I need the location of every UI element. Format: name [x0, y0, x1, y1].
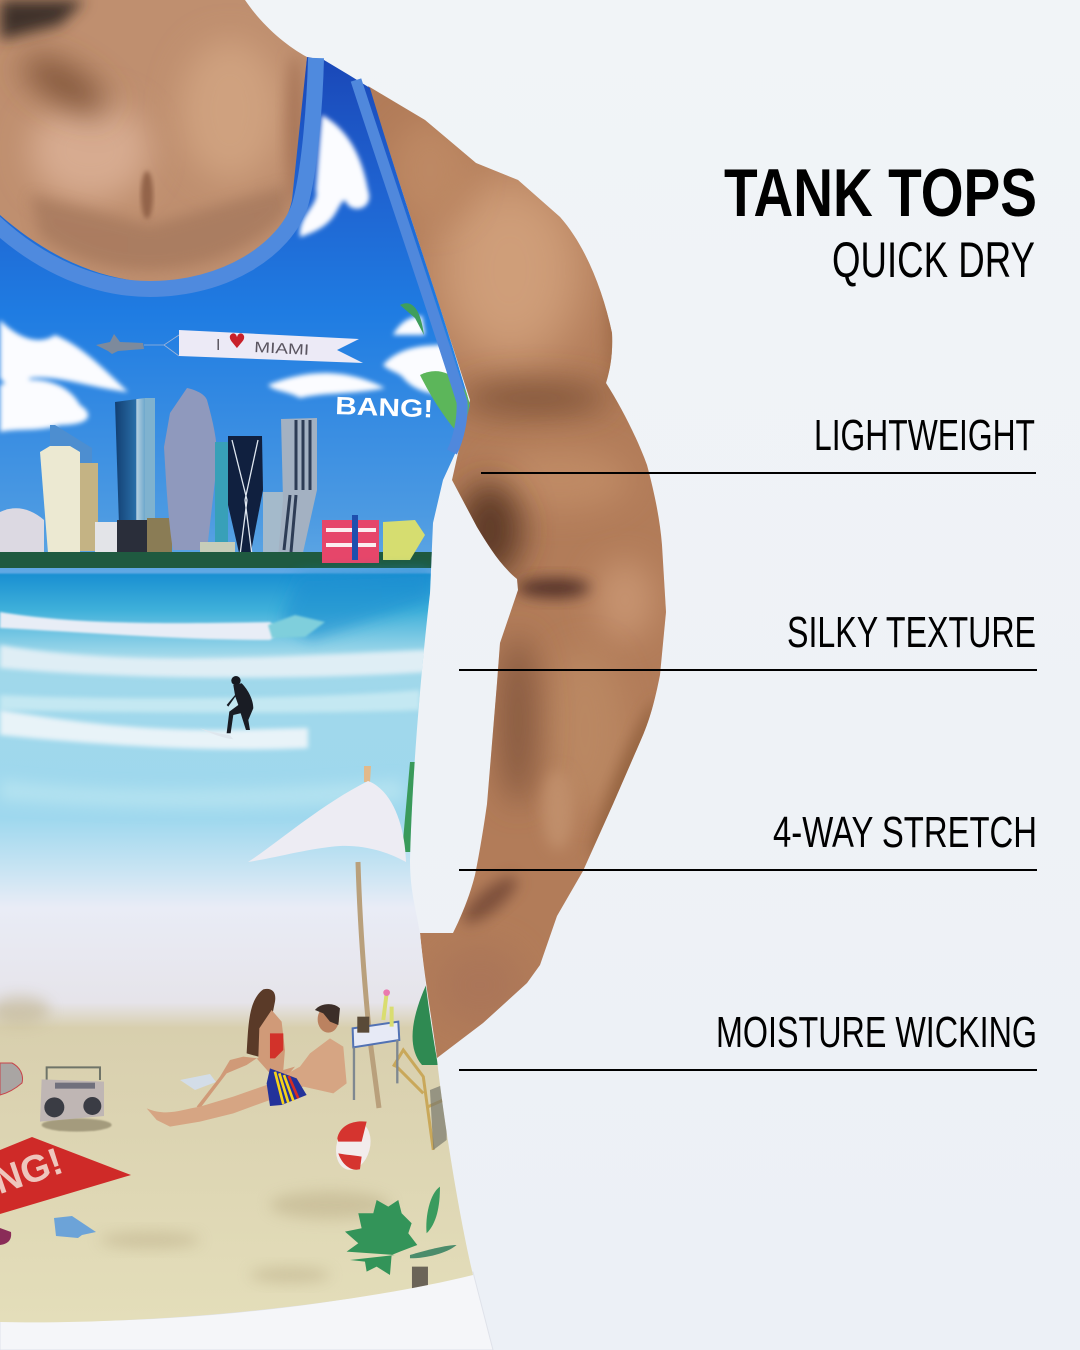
model chest and neck [0, 0, 307, 281]
tank top [0, 57, 473, 1322]
red towel [0, 1137, 131, 1214]
arm binding [356, 80, 462, 452]
sand shadows [0, 996, 390, 1283]
side table with drinks [353, 989, 399, 1100]
model arm and shoulder [360, 80, 680, 1070]
beach ball [331, 1118, 376, 1174]
white shorts [0, 1272, 493, 1350]
beach couple [147, 989, 347, 1127]
purple object [0, 1228, 11, 1245]
bottom palm [345, 1187, 457, 1297]
plane banner: ♥ [228, 329, 246, 353]
sky clouds [0, 115, 458, 432]
title [724, 155, 1037, 288]
flip flops [54, 1074, 216, 1238]
boombox [40, 1067, 112, 1132]
surfer [200, 676, 253, 739]
life ring [0, 1063, 23, 1095]
skyline [0, 388, 435, 568]
umbrella [248, 766, 406, 1108]
neck binding [0, 58, 316, 289]
beach chair [393, 1050, 447, 1150]
sea and waves [0, 570, 430, 808]
brand logo: BANG! [335, 392, 434, 423]
plane banner: MIAMI [254, 339, 310, 359]
plane banner: I [216, 337, 220, 354]
palm leaves [400, 303, 470, 1065]
plane banner [96, 329, 363, 363]
